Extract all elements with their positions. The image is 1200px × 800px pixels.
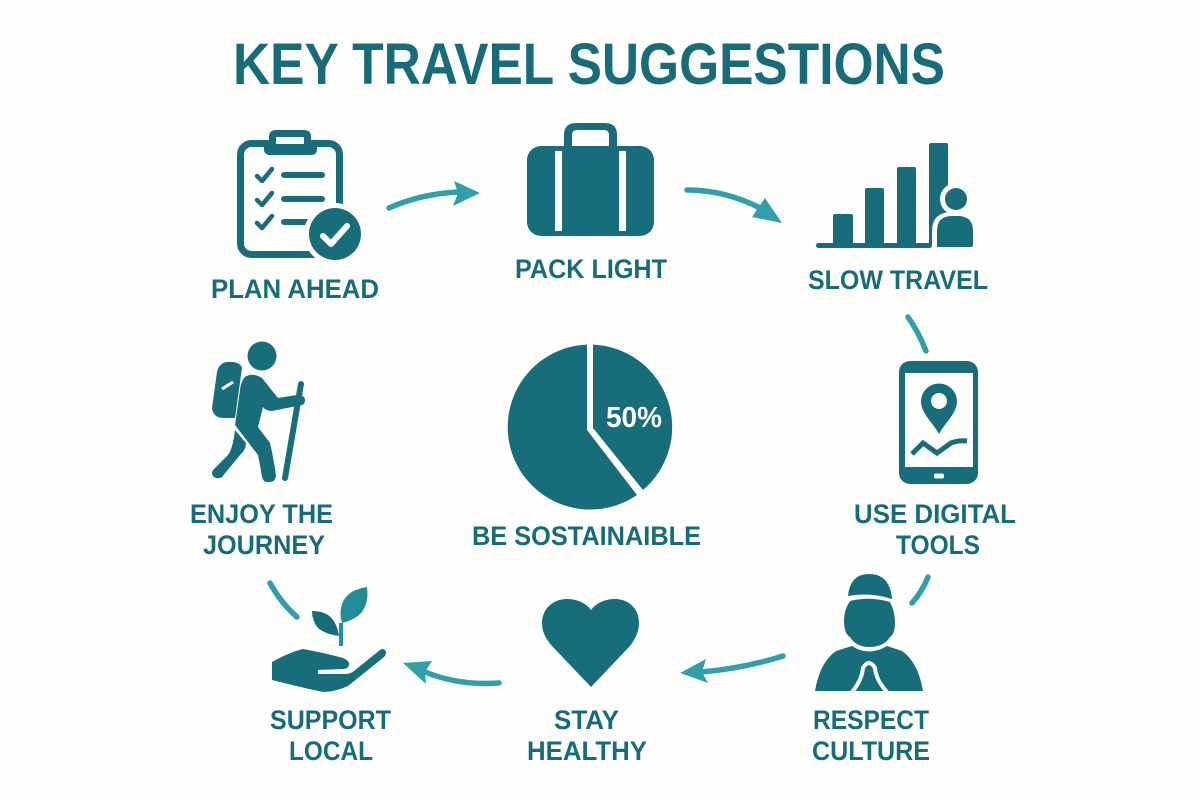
- arrow: respect culture to stay healthy: [680, 656, 783, 683]
- panel: slow travel: [808, 143, 988, 295]
- label: use digital tools: [854, 499, 1016, 560]
- arrow: slow travel to digital tools: [908, 317, 926, 351]
- label: enjoy the journey: [190, 499, 333, 560]
- label: respect culture: RESPECT: [813, 705, 929, 735]
- icon: suitcase: [527, 123, 654, 236]
- label: respect culture: CULTURE: [812, 736, 930, 766]
- label: use digital tools: USE DIGITAL: [854, 499, 1016, 529]
- panel: pack light: [515, 123, 667, 284]
- label: plan ahead: PLAN AHEAD: [211, 274, 379, 304]
- label: be sostainaible: BE SOSTAINAIBLE: [472, 521, 701, 551]
- label: slow travel: SLOW TRAVEL: [808, 265, 988, 295]
- icon: hand holding plant: [272, 587, 386, 692]
- panel: use digital tools: [854, 361, 1016, 560]
- arrow: plan ahead to pack light: [389, 181, 480, 208]
- icon: bar chart with person: [816, 143, 978, 249]
- title: KEY TRAVEL SUGGESTIONS: [233, 32, 945, 97]
- icon: clipboard with check: [240, 130, 366, 265]
- panel: support local: [270, 587, 391, 766]
- label: support local: LOCAL: [289, 736, 373, 766]
- icon: person with praying hands: [815, 574, 923, 692]
- pie value: 50%: [606, 402, 662, 434]
- label: enjoy the journey: JOURNEY: [203, 530, 325, 560]
- label: pack light: PACK LIGHT: [515, 254, 667, 284]
- arrow: support local to enjoy the journey: [270, 583, 297, 617]
- arrow: digital tools to respect culture: [912, 577, 928, 603]
- panel: plan ahead: [211, 130, 379, 304]
- label: use digital tools: TOOLS: [896, 530, 980, 560]
- icon: phone with map pin: [899, 361, 978, 484]
- chart: pie: [508, 345, 672, 510]
- label: stay healthy: HEALTHY: [527, 736, 647, 766]
- icon: heart: [542, 599, 639, 687]
- label: stay healthy: STAY: [554, 705, 619, 735]
- label: enjoy the journey: ENJOY THE: [190, 499, 333, 529]
- icon: hiker: [212, 342, 305, 482]
- label: support local: SUPPORT: [270, 705, 391, 735]
- label: stay healthy: [527, 705, 647, 766]
- panel: enjoy the journey: [190, 342, 333, 560]
- arrow: pack light to slow travel: [687, 190, 782, 223]
- panel: be sustainable: [472, 345, 701, 551]
- label: respect culture: [812, 705, 930, 766]
- panel: respect culture: [812, 574, 930, 766]
- arrow: stay healthy to support local: [403, 661, 499, 684]
- label: support local: [270, 705, 391, 766]
- panel: stay healthy: [527, 599, 647, 766]
